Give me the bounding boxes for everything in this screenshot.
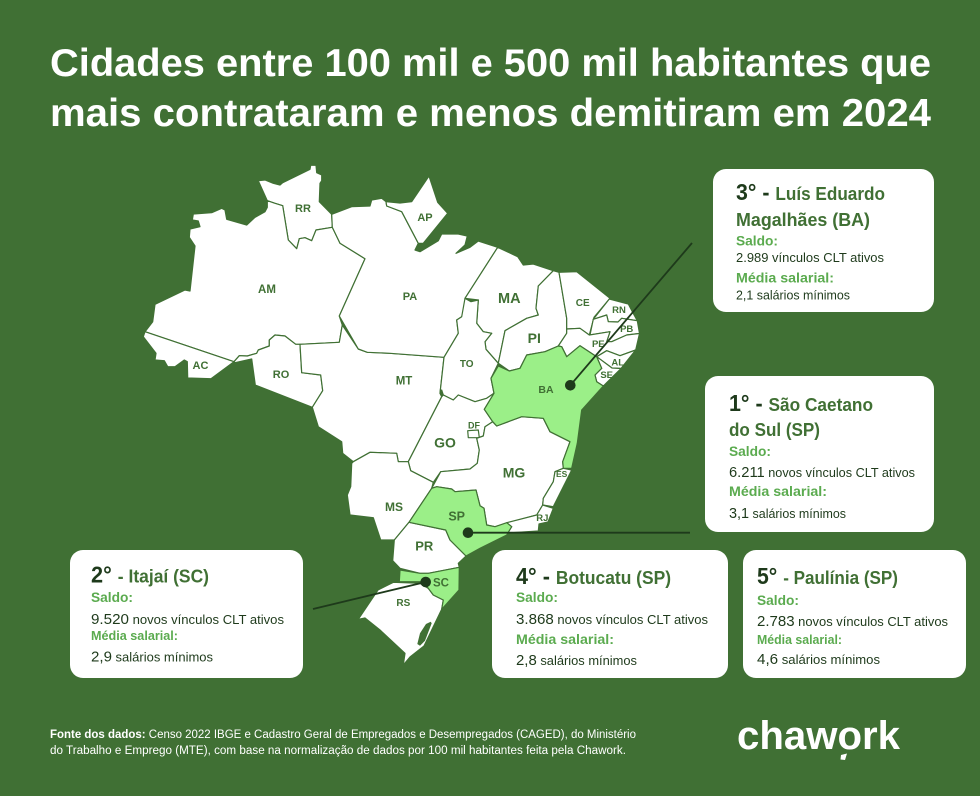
card: 3rd place Luís Eduardo Magalhães [713,169,934,312]
state: GO [408,393,494,482]
card: 3rd place Luís Eduardo Magalhães: Saldo: [736,232,778,248]
state: RO [234,335,323,407]
card: 2nd place Itajaí: Saldo: [91,589,133,605]
source note: do Trabalho e Emprego (MTE), com base na normalização de dados por 100 mil habitantes feita pela Chawork. [50,745,626,757]
state labels: AC [193,360,208,372]
state: AM [145,201,365,362]
state labels: PI [528,330,541,346]
state labels: MG [503,464,525,480]
state labels: ES [556,469,568,479]
card: 3rd place Luís Eduardo Magalhães: 2,1 salários mínimos [736,288,850,302]
card: 2nd place Itajaí [70,550,303,678]
state: PR [393,522,466,573]
card: 1st place São Caetano do Sul: do Sul (SP) [729,419,820,440]
state: RR [258,165,332,249]
state: BA (highlighted) [484,346,603,468]
state labels: BA [538,384,554,396]
card: 3rd place Luís Eduardo Magalhães: Magalhães (BA) [736,209,870,230]
state: AC [143,332,234,379]
card: 1st place São Caetano do Sul [705,376,934,532]
card: 5th place Paulínia [743,550,966,678]
card: 1st place São Caetano do Sul: Saldo: [729,443,771,459]
state: DF [468,430,479,438]
state labels: RN [612,305,626,316]
state labels: GO [434,434,456,450]
state: AL [597,350,636,368]
state labels: PE [592,339,605,350]
state: SC (highlighted) [399,567,459,609]
state labels: TO [460,359,474,370]
title [50,42,932,135]
title: mais contrataram e menos demitiram em 2024 [50,92,932,135]
state: PE [558,328,640,357]
card: 3rd place Luís Eduardo Magalhães: 2.989 vínculos CLT ativos [736,251,884,265]
card: 1st place São Caetano do Sul: 6.211 novos vínculos CLT ativos [729,465,915,481]
card: 1st place São Caetano do Sul: Média salarial: [729,483,827,499]
card: 4th place Botucatu: Saldo: [516,589,558,605]
state labels: PR [415,538,434,554]
state: SE [595,357,621,386]
state: MS [347,452,433,540]
card: 4th place Botucatu: Média salarial: [516,631,614,647]
state labels: CE [576,298,590,309]
state: CE [559,272,610,335]
card: 4th place Botucatu: 3.868 novos vínculos CLT ativos [516,612,708,628]
state labels: AL [611,358,624,368]
card: 2nd place Itajaí: 2° - Itajaí (SC) [91,562,209,588]
state: TO [440,298,498,402]
state labels: RO [273,369,290,381]
state: SP (highlighted) [409,487,512,556]
connector: Santa Catarina marker [313,577,431,609]
state: AP [386,176,448,243]
state labels: DF [468,420,480,430]
state: ES [543,468,572,507]
card: 4th place Botucatu: 4° - Botucatu (SP) [516,563,671,589]
state labels: SE [600,370,613,381]
state labels: RS [396,598,411,609]
state: MT [300,325,444,462]
state: MG [432,417,570,527]
state labels: AP [417,212,433,224]
logo: chawork: chawork [737,714,901,758]
state: PB [590,315,640,342]
state labels: PA [403,291,417,303]
card: 1st place São Caetano do Sul: 3,1 salários mínimos [729,506,846,522]
state: RN [593,299,637,322]
source note: Fonte dos dados: Censo 2022 IBGE e Cadastro Geral de Empregados e Desempregados (CAGED), do Ministério [50,729,636,741]
card: 4th place Botucatu [492,550,728,678]
state: MA [465,247,553,363]
card: 2nd place Itajaí: 9.520 novos vínculos CLT ativos [91,612,284,628]
state labels: AM [258,284,276,296]
state: PI [498,271,567,371]
card: 4th place Botucatu: 2,8 salários mínimos [516,653,637,669]
state labels: RJ [536,513,548,524]
card: 5th place Paulínia: 5° - Paulínia (SP) [757,563,898,589]
state labels: SC [433,578,449,590]
card: 5th place Paulínia: 2.783 novos vínculos CLT ativos [757,614,948,630]
state labels: MT [396,376,412,388]
map of Brazil [143,165,640,665]
title: Cidades entre 100 mil e 500 mil habitantes que [50,42,931,85]
card: 5th place Paulínia: Saldo: [757,592,799,608]
state labels: RR [295,203,311,215]
card: 1st place São Caetano do Sul: 1° - São Caetano [729,390,873,416]
connector: Bahia marker [565,243,692,391]
card: 2nd place Itajaí: 2,9 salários mínimos [91,650,213,666]
state labels: MS [385,500,403,514]
state labels [193,203,633,609]
state: PA [332,198,498,357]
card: 5th place Paulínia: Média salarial: [757,633,842,647]
source note [50,729,636,757]
state: RJ [507,505,553,533]
state labels: PB [620,324,633,335]
card: 3rd place Luís Eduardo Magalhães: Média salarial: [736,270,834,286]
card: 5th place Paulínia: 4,6 salários mínimos [757,652,880,668]
state labels: MA [498,291,521,307]
state labels: SP [448,510,465,524]
card: 3rd place Luís Eduardo Magalhães: 3° - Luís Eduardo [736,179,885,205]
card: 2nd place Itajaí: Média salarial: [91,629,178,643]
connector: São Paulo marker [463,527,690,538]
state: RS [358,582,443,665]
lagoon [417,622,432,646]
